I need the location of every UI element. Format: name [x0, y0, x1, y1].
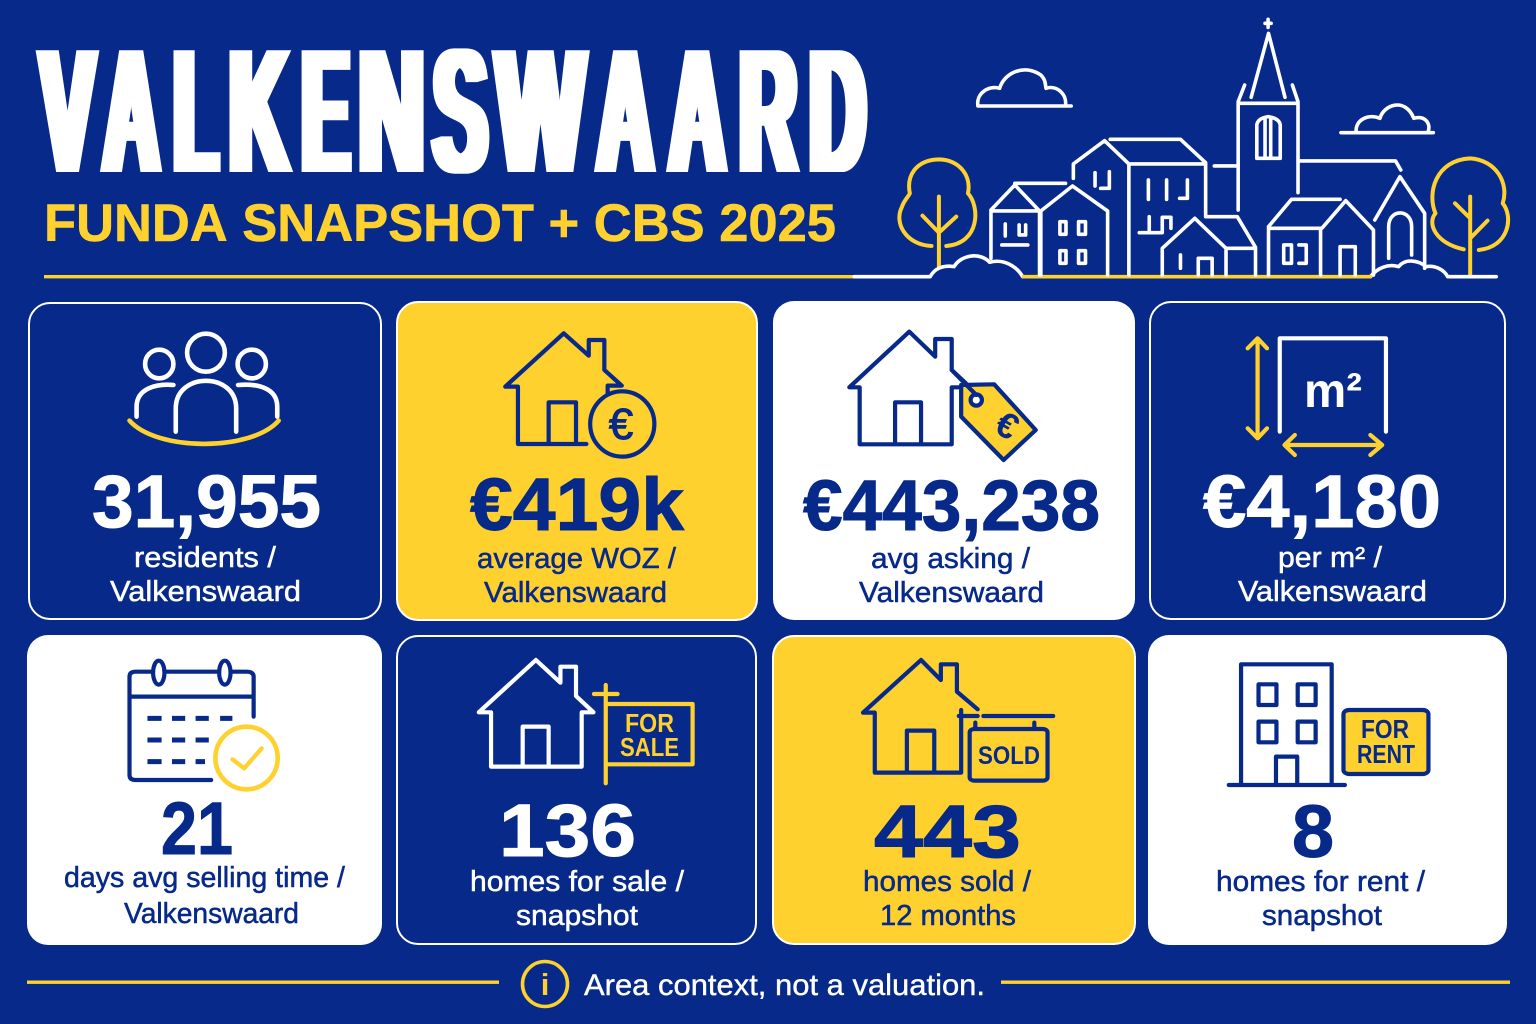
card background [397, 302, 757, 620]
sign text: FOR [625, 708, 674, 738]
card background [1148, 635, 1507, 945]
title: A [104, 12, 159, 210]
icon: info [522, 962, 568, 1006]
panel: average WOZ [397, 302, 757, 620]
icon: euro sign: € [609, 400, 633, 449]
card background [773, 636, 1135, 944]
text: D [810, 12, 865, 210]
icon: tag euro sign: € [988, 402, 1026, 448]
label: snapshot [516, 900, 638, 932]
label: average WOZ / [477, 543, 677, 575]
houses [991, 139, 1425, 275]
sign text [620, 708, 679, 762]
label: 12 months [880, 900, 1016, 932]
label [1216, 866, 1426, 932]
subtitle: FUNDA SNAPSHOT + CBS 2025 [44, 194, 836, 253]
label: Valkenswaard [124, 898, 299, 930]
label: Valkenswaard [859, 577, 1044, 609]
card background [27, 635, 382, 945]
sign text: SOLD [978, 742, 1040, 770]
title: W [496, 12, 584, 210]
label: homes for sale / [470, 866, 685, 898]
label [859, 543, 1044, 609]
number: 31,955 [92, 460, 321, 543]
panel: homes for rent [1148, 635, 1507, 945]
label: avg asking / [871, 543, 1031, 575]
title: S [433, 12, 487, 210]
title: R [740, 12, 796, 210]
title: A [598, 12, 653, 210]
title: N [359, 12, 424, 210]
icon: house with for-sale sign [479, 660, 693, 783]
label: days avg selling time / [64, 862, 346, 894]
skyline illustration [854, 19, 1508, 277]
icon: calendar with check [130, 661, 278, 789]
label [470, 866, 685, 932]
sign text: FOR [1361, 714, 1409, 744]
title: A [670, 12, 725, 210]
label [477, 543, 677, 609]
label: Valkenswaard [484, 577, 667, 609]
icon: house with sold sign [863, 660, 1053, 781]
label [1238, 542, 1427, 608]
icon: house with price tag [849, 332, 1036, 460]
label [64, 862, 346, 930]
icon: people [130, 334, 279, 444]
card background [29, 303, 381, 619]
label: per m² / [1278, 542, 1383, 574]
label: homes for rent / [1216, 866, 1426, 898]
card background [773, 301, 1135, 620]
number: €4,180 [1203, 460, 1441, 543]
label: residents / [134, 542, 277, 574]
card background [1150, 302, 1505, 619]
number: 443 [874, 790, 1021, 873]
title: E [302, 12, 349, 210]
panel: price per square metre [1150, 302, 1505, 619]
sign text: SALE [620, 732, 679, 762]
sign text: RENT [1357, 739, 1415, 769]
title: K [230, 12, 288, 210]
icon: info: i [541, 967, 549, 1002]
panel: residents [29, 303, 381, 619]
label: Valkenswaard [1238, 576, 1427, 608]
number: €443,238 [803, 467, 1100, 546]
label: snapshot [1262, 900, 1382, 932]
label: Valkenswaard [110, 576, 301, 608]
title: L [174, 12, 217, 210]
clouds [978, 70, 1433, 133]
number: 136 [499, 789, 636, 872]
label [863, 866, 1032, 932]
number: 21 [161, 787, 233, 870]
icon: apartment with for-rent sign [1229, 664, 1428, 785]
number: €419k [470, 463, 685, 546]
icon: m2 text: m² [1304, 365, 1362, 418]
header underline [44, 275, 856, 278]
title: V [40, 12, 94, 210]
icon: house with euro coin [505, 333, 654, 457]
church spire and tower [1238, 19, 1298, 210]
card background [397, 636, 756, 944]
trees [899, 158, 1508, 275]
ground and bushes [854, 256, 1496, 277]
panel: homes for sale [397, 636, 756, 944]
sign text [1357, 714, 1415, 769]
footer note: Area context, not a valuation. [584, 969, 985, 1002]
number: 8 [1292, 790, 1334, 873]
icon: area square with arrows [1248, 338, 1386, 455]
panel: average asking price [773, 301, 1135, 620]
label [110, 542, 301, 608]
panel: selling time [27, 635, 382, 945]
panel: homes sold [773, 636, 1135, 944]
label: homes sold / [863, 866, 1032, 898]
